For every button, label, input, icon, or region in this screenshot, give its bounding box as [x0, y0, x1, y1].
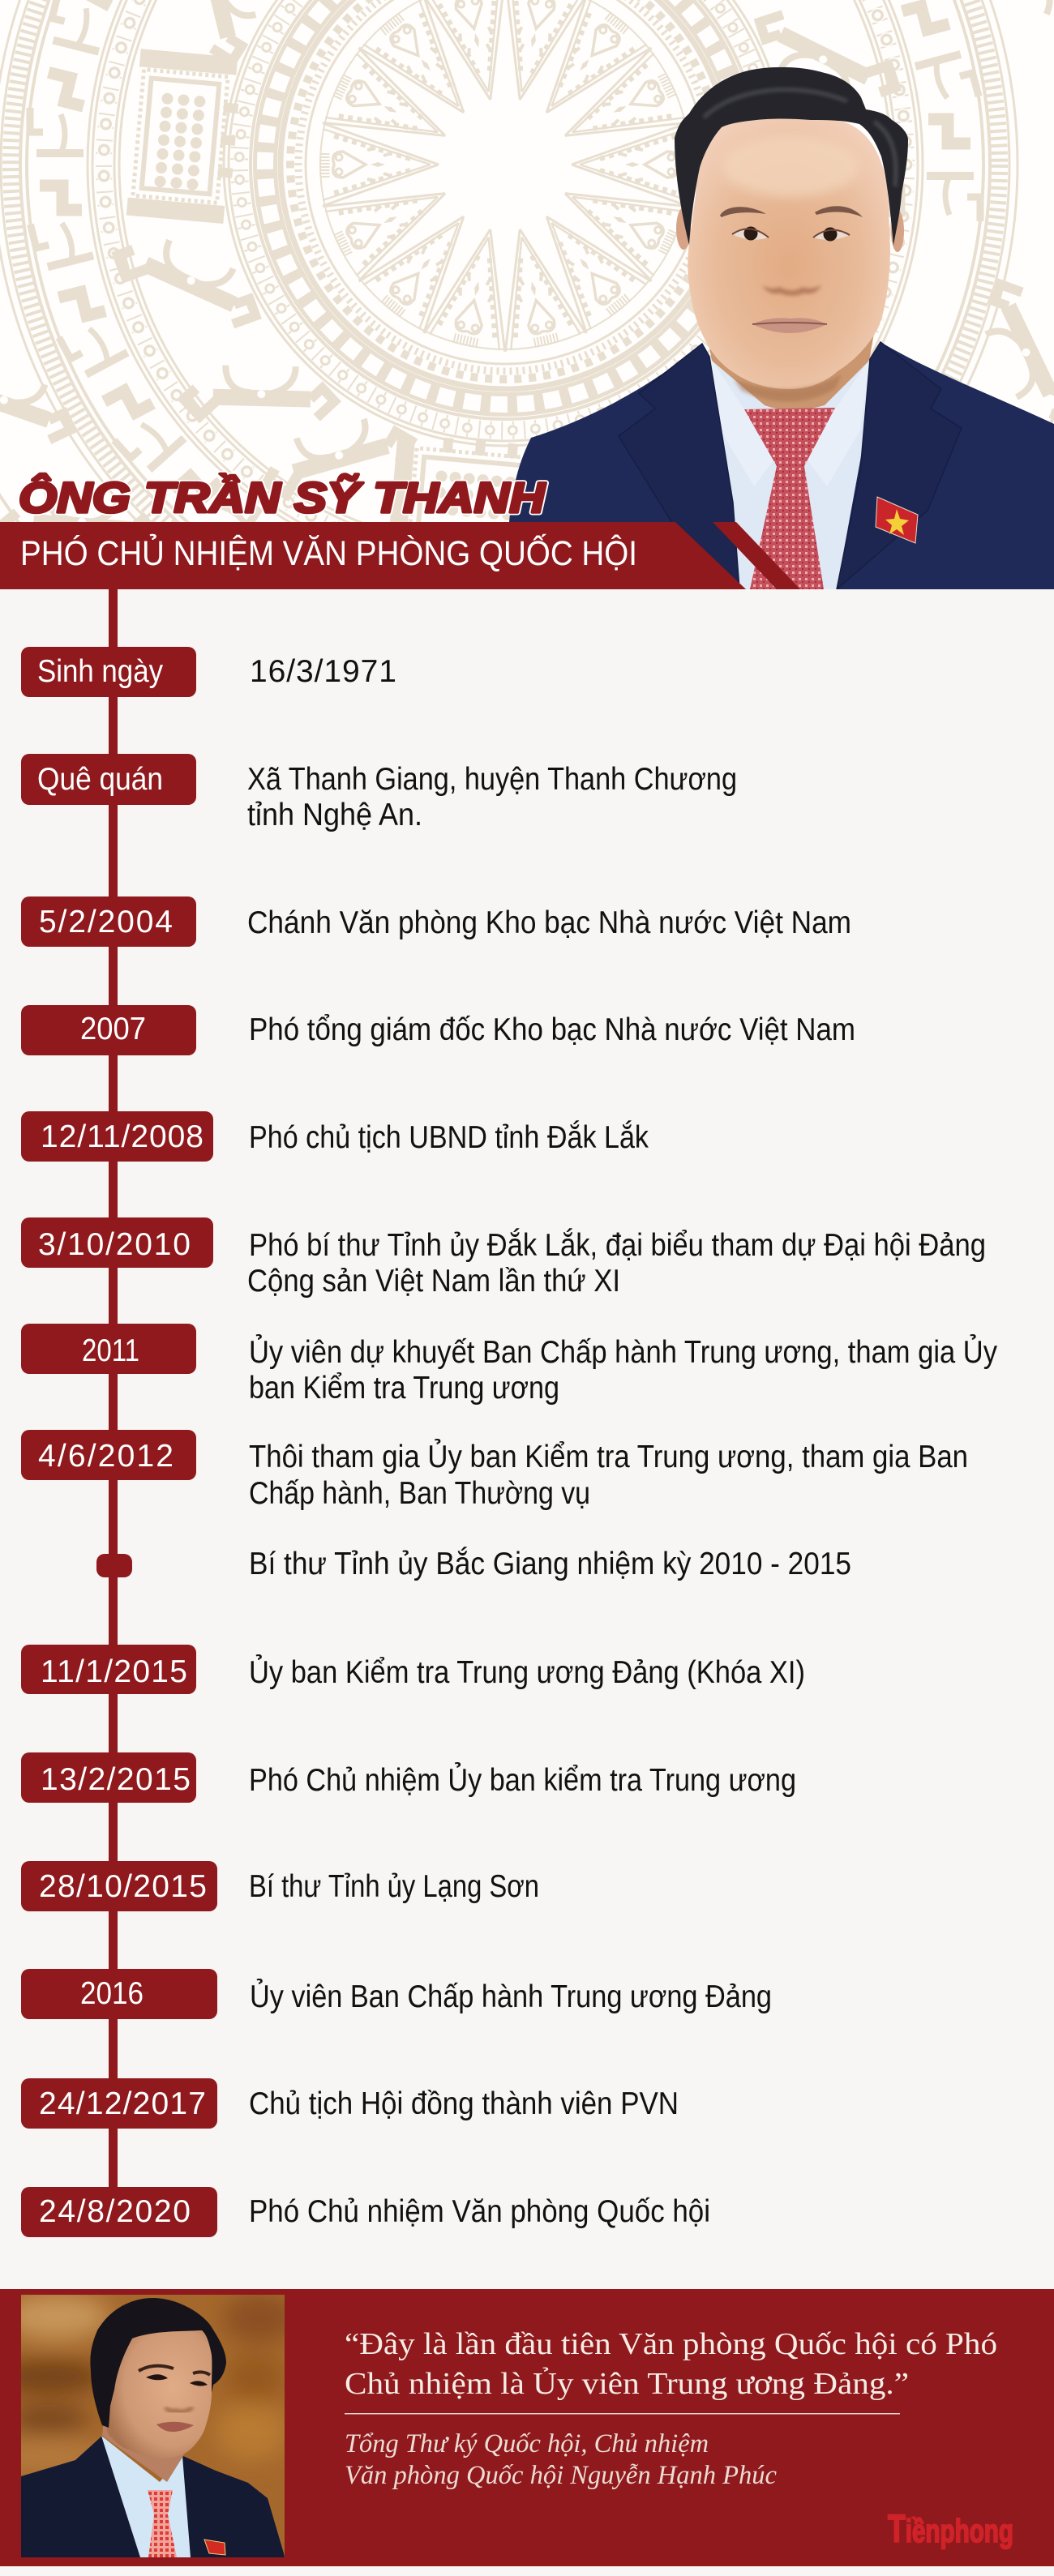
entry: Bí thư Tỉnh ủy Bắc Giang: Bí thư Tỉnh ủy Bắc Giang nhiệm kỳ 2010 - 2015 [249, 1547, 851, 1581]
hair [675, 67, 908, 246]
attribution [345, 2429, 777, 2490]
entry: 24/12/2017: 24/12/2017 [39, 2086, 206, 2121]
shirt [709, 357, 870, 589]
face [688, 116, 890, 389]
nose [165, 2407, 193, 2411]
scene figures [0, 0, 1054, 700]
entry: 4/6/2012: 4/6/2012 [38, 1439, 174, 1474]
attribution: Tổng Thư ký Quốc hội, Chủ nhiệm [345, 2429, 709, 2458]
blurred background [21, 2295, 285, 2472]
entry: 3/10/2010 [21, 1217, 986, 1299]
drum rings [0, 0, 1054, 522]
panel: quote footer [0, 2289, 1054, 2566]
entry: 12/11/2008: Phó chủ tịch UBND tỉnh Đắk Lắk [249, 1120, 649, 1155]
entry: 2016 [21, 1969, 772, 2019]
entry: Quê quán: tỉnh Nghệ An. [247, 798, 422, 832]
shirt [101, 2436, 191, 2557]
entry: 12/11/2008 [21, 1111, 649, 1162]
face [107, 2329, 212, 2458]
entry: 28/10/2015: 28/10/2015 [39, 1869, 207, 1904]
collar [709, 357, 870, 486]
entry: 2011 [21, 1324, 997, 1406]
entry: 5/2/2004: 5/2/2004 [39, 905, 173, 939]
entry: 5/2/2004 [21, 896, 851, 947]
quote [345, 2327, 997, 2401]
mouth [752, 318, 827, 333]
eyes [732, 227, 850, 242]
entry: 13/2/2015: 13/2/2015 [41, 1762, 191, 1797]
national assembly pin [876, 497, 918, 543]
entry: 28/10/2015 [21, 1861, 539, 1911]
timeline spine [109, 589, 118, 2190]
neck [102, 2425, 183, 2482]
entry: Sinh ngày: 16/3/1971 [250, 654, 396, 689]
nose [762, 285, 821, 296]
hair [90, 2298, 226, 2428]
mouth [156, 2422, 194, 2432]
entry: 4/6/2012: Chấp hành, Ban Thường vụ [249, 1476, 590, 1511]
entry: 24/8/2020: Phó Chủ nhiệm Văn phòng Quốc hội [249, 2194, 710, 2229]
entry: 12/11/2008: 12/11/2008 [41, 1119, 204, 1154]
hair sheen [704, 90, 896, 186]
suit [21, 2436, 285, 2557]
title: person's name: ÔNG TRẦN SỸ THANH [19, 473, 546, 522]
lapels [619, 342, 962, 589]
title band [0, 522, 746, 589]
quote divider [345, 2413, 900, 2414]
forehead highlight [722, 135, 859, 197]
entry: Quê quán: Xã Thanh Giang, huyện Thanh Chương [247, 762, 737, 797]
entry: 11/1/2015: 11/1/2015 [41, 1654, 187, 1689]
entry: 2016: Ủy viên Ban Chấp hành Trung ương Đảng [250, 1979, 772, 2014]
entry: 24/12/2017: Chủ tịch Hội đồng thành viên PVN [249, 2086, 679, 2121]
entry: 13/2/2015: Phó Chủ nhiệm Ủy ban kiểm tra Trung ương [249, 1762, 796, 1798]
entry: Quê quán: Quê quán [37, 762, 163, 797]
entry: 11/1/2015: Ủy ban Kiểm tra Trung ương Đảng (Khóa XI) [249, 1654, 805, 1690]
neck [709, 336, 874, 409]
ear [95, 2370, 111, 2407]
entry: 24/12/2017 [21, 2078, 679, 2129]
star rays [323, 0, 688, 352]
photo: Nguyễn Hạnh Phúc [21, 2295, 285, 2557]
entry: 3/10/2010: 3/10/2010 [38, 1227, 191, 1262]
brows [139, 2366, 210, 2375]
entry: 4/6/2012 [21, 1430, 968, 1511]
ears [676, 208, 691, 250]
pin [204, 2540, 225, 2555]
entry: Sinh ngày [21, 647, 396, 697]
entry: 2007: Phó tổng giám đốc Kho bạc Nhà nước Việt Nam [249, 1012, 855, 1047]
eyes [146, 2374, 208, 2386]
band stripe [713, 522, 800, 589]
portrait: Trần Sỹ Thanh [503, 67, 1054, 589]
entry: Quê quán [21, 754, 737, 832]
logo: Tiền Phong: Tiềnphong [888, 2508, 1013, 2551]
entry: 24/8/2020 [21, 2187, 710, 2237]
entry: 2011: 2011 [82, 1333, 139, 1368]
tie [744, 408, 835, 589]
entry: 4/6/2012: Thôi tham gia Ủy ban Kiểm tra Trung ương, tham gia Ban [249, 1439, 968, 1474]
entry: 2007 [21, 1005, 855, 1055]
header background [0, 0, 1054, 589]
entry: 3/10/2010: Cộng sản Việt Nam lần thứ XI [247, 1264, 620, 1299]
title: person's name: ÔNG TRẦN SỸ THANH [19, 473, 546, 522]
entry: 2011: ban Kiểm tra Trung ương [249, 1371, 559, 1406]
entry: 28/10/2015: Bí thư Tỉnh ủy Lạng Sơn [249, 1869, 539, 1904]
entry: 13/2/2015 [21, 1752, 796, 1803]
header [0, 0, 1054, 589]
entry: Sinh ngày: Sinh ngày [37, 654, 163, 689]
under-chin shadow [734, 374, 842, 402]
attribution: Văn phòng Quốc hội Nguyễn Hạnh Phúc [345, 2461, 777, 2490]
quote: Chủ nhiệm là Ủy viên Trung ương Đảng.” [345, 2366, 909, 2401]
entry: 2007: 2007 [80, 1012, 146, 1046]
entry: 24/8/2020: 24/8/2020 [39, 2194, 191, 2229]
suit [503, 342, 1054, 589]
subtitle: PHÓ CHỦ NHIỆM VĂN PHÒNG QUỐC HỘI [20, 533, 637, 573]
entry: 11/1/2015 [21, 1645, 805, 1694]
quote: “Đây là lần đầu tiên Văn phòng Quốc hội có Phó [345, 2327, 997, 2361]
entry: 5/2/2004: Chánh Văn phòng Kho bạc Nhà nước Việt Nam [247, 905, 851, 940]
entry: 2016: 2016 [80, 1976, 144, 2011]
eyebrows [720, 206, 863, 217]
bronze drum pattern [0, 0, 1054, 522]
tie [148, 2490, 177, 2557]
